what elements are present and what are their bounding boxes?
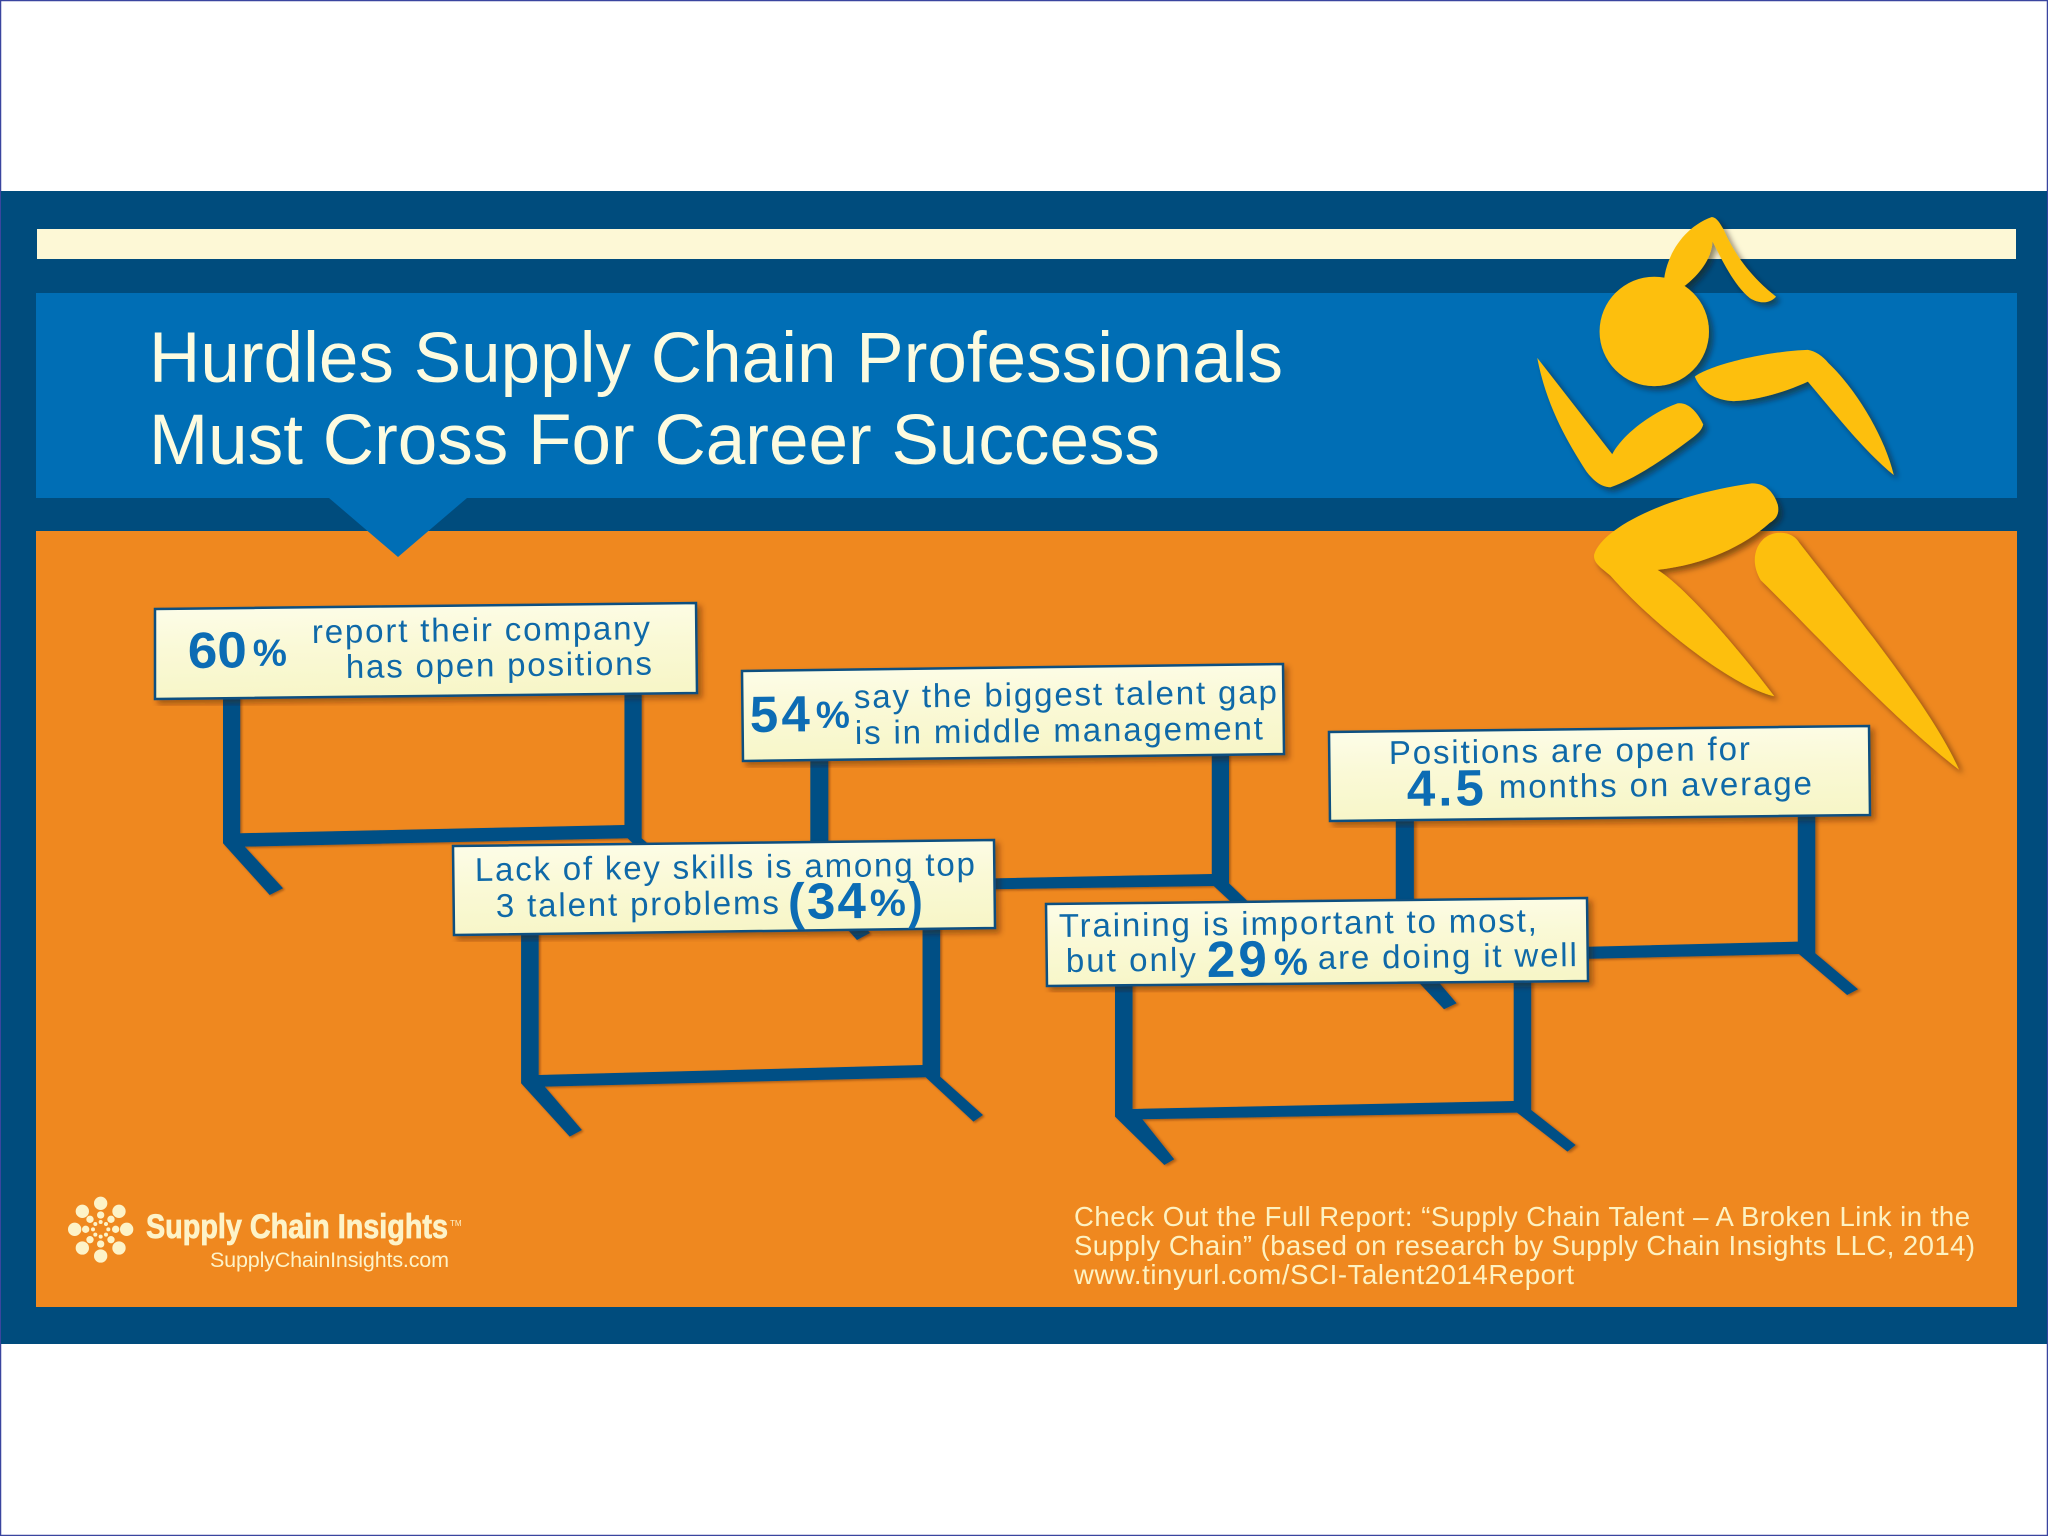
hurdle 1: 60% open positions: has open positions	[346, 645, 652, 685]
report source text: Check Out the Full Report: “Supply Chain Talent – A Broken Link in the	[1074, 1201, 1970, 1232]
icon: yellow runner	[1537, 217, 1959, 770]
title	[149, 319, 1283, 480]
hurdle 2: 54% middle management: say the biggest talent gap	[854, 673, 1277, 715]
title banner with pointer	[36, 293, 2017, 557]
icon: logo burst	[68, 1197, 133, 1263]
hurdle 2: 54% middle management	[742, 664, 1284, 940]
title: Hurdles Supply Chain Professionals	[149, 319, 1283, 398]
dark blue frame band	[1, 191, 2047, 1344]
hurdle 5: training 29%: %	[1274, 942, 1308, 984]
hurdle 5: training 29%: but only	[1066, 941, 1197, 979]
hurdle 3: lack of key skills 34%: )	[907, 872, 923, 929]
logo: Supply Chain Insights: Supply Chain Insights	[146, 1208, 448, 1246]
hurdle 4: positions open 4.5 months: months on average	[1499, 764, 1812, 805]
hurdle 5: training 29%: Training is important to most,	[1059, 902, 1537, 944]
hurdle 2: 54% middle management: 54	[749, 685, 811, 743]
hurdle 5: training 29%	[1046, 898, 1588, 1165]
hurdle 3: lack of key skills 34%: 3 talent problems	[496, 884, 779, 924]
hurdle 3: lack of key skills 34%	[453, 840, 995, 1137]
cream top bar	[37, 229, 2016, 259]
hurdle 3: lack of key skills 34%: (34	[787, 872, 867, 930]
hurdle 1: 60% open positions: %	[253, 633, 287, 675]
hurdle 5: training 29%: 29	[1206, 930, 1267, 988]
hurdle 2: 54% middle management: %	[816, 695, 850, 737]
hurdle 2: 54% middle management: is in middle management	[855, 709, 1263, 751]
report source text: Supply Chain” (based on research by Supply Chain Insights LLC, 2014)	[1074, 1230, 1975, 1261]
report source text: www.tinyurl.com/SCI-Talent2014Report	[1073, 1259, 1574, 1290]
logo: Supply Chain Insights	[68, 1197, 462, 1272]
title: Must Cross For Career Success	[149, 401, 1160, 480]
hurdle 1: 60% open positions	[155, 603, 697, 895]
hurdle 4: positions open 4.5 months	[1329, 726, 1870, 1009]
hurdle 1: 60% open positions: report their company	[312, 609, 651, 650]
logo: Supply Chain Insights: SupplyChainInsights.com	[210, 1248, 449, 1272]
logo: Supply Chain Insights: TM	[450, 1219, 462, 1228]
hurdle 3: lack of key skills 34%: Lack of key skills is among top	[475, 845, 975, 888]
hurdle 1: 60% open positions: 60	[187, 621, 247, 679]
hurdle 4: positions open 4.5 months: 4.5	[1406, 759, 1484, 817]
hurdle 3: lack of key skills 34%: %	[870, 883, 906, 925]
panel: orange hurdles field	[36, 531, 2017, 1307]
hurdle 5: training 29%: are doing it well	[1318, 936, 1577, 976]
report source text	[1073, 1201, 1975, 1290]
hurdle 4: positions open 4.5 months: Positions are open for	[1389, 730, 1750, 771]
